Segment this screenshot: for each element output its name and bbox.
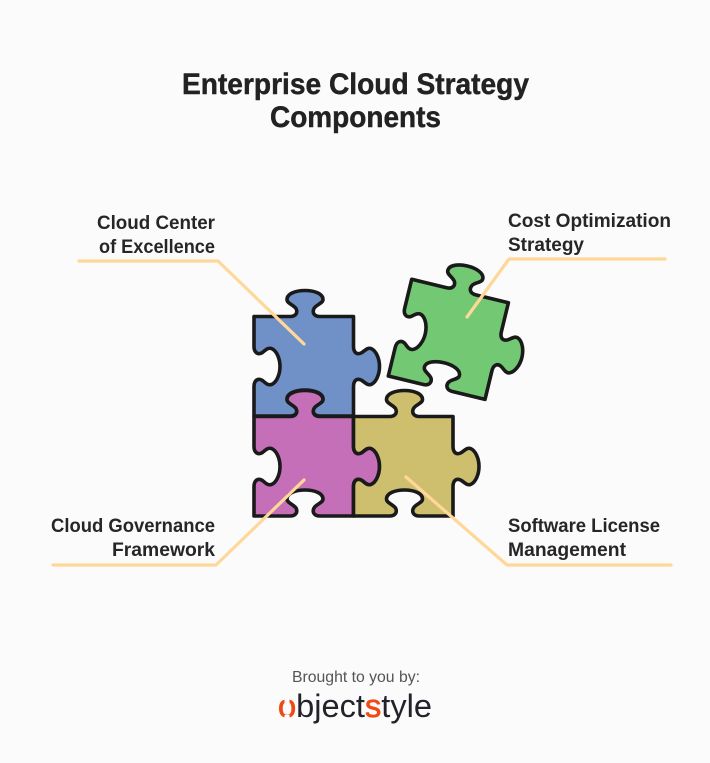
- label: Software License Management: Software License: [508, 516, 660, 537]
- label: Cloud Governance Framework: Cloud Governance: [51, 516, 215, 537]
- label: Cost Optimization Strategy: Strategy: [508, 235, 584, 256]
- label: Cloud Center of Excellence: Cloud Center: [97, 213, 216, 234]
- puzzle piece: magenta: [254, 390, 380, 516]
- label: Cloud Center of Excellence: [97, 213, 216, 258]
- label: Cloud Governance Framework: [51, 516, 215, 561]
- label: Cloud Center of Excellence: of Excellence: [99, 237, 215, 258]
- label: Cloud Governance Framework: Framework: [112, 540, 215, 561]
- label: Software License Management: [508, 516, 660, 561]
- puzzle graphic: [254, 254, 540, 516]
- puzzle piece: green: [388, 254, 540, 406]
- leader line: Cost Optimization Strategy: [467, 259, 665, 317]
- label: Software License Management: Management: [508, 540, 627, 561]
- logo: objectstyle: objectstyle: [278, 688, 432, 724]
- label: Cost Optimization Strategy: [508, 211, 671, 256]
- label: Cost Optimization Strategy: Cost Optimization: [508, 211, 671, 232]
- title: [182, 68, 529, 134]
- footer credit: Brought to you by:: [292, 669, 420, 686]
- title: Enterprise Cloud Strategy: [182, 68, 529, 101]
- puzzle piece: yellow: [354, 390, 479, 516]
- leader line: Software License Management: [406, 477, 671, 565]
- title: Components: [270, 101, 441, 134]
- leader line: Cloud Governance Framework: [53, 480, 304, 565]
- leader line: Cloud Center of Excellence: [79, 261, 304, 344]
- puzzle piece: blue: [254, 290, 380, 416]
